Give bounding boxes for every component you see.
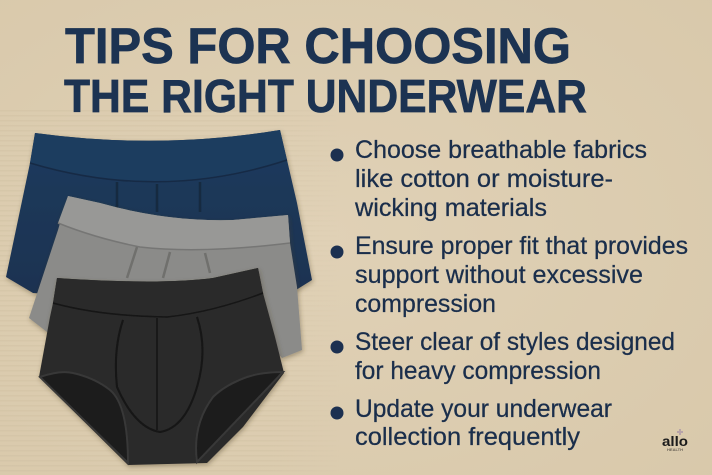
photo: three stacked briefs: [6, 130, 312, 465]
navy briefs: [6, 130, 312, 300]
logo: allo health: allo: [662, 433, 688, 449]
tip 4: Update your underwear: [355, 395, 612, 423]
logo: allo health: [662, 429, 688, 452]
title: THE RIGHT UNDERWEAR: [64, 70, 587, 122]
black briefs: [39, 268, 284, 465]
title: [64, 18, 587, 122]
tip 1: like cotton or moisture-: [355, 165, 613, 193]
tip 2: [330, 232, 688, 318]
logo: allo health: HEALTH: [667, 447, 683, 452]
tip 2: compression: [355, 290, 496, 318]
tip 1: Choose breathable fabrics: [355, 136, 647, 164]
tip 3: [330, 328, 675, 385]
tip 2: Ensure proper fit that provides: [355, 232, 688, 260]
tip 4: collection frequently: [355, 423, 580, 451]
bullet list: [330, 136, 688, 451]
background: [0, 110, 288, 472]
tip 2: support without excessive: [355, 261, 643, 289]
gray briefs: [29, 196, 302, 358]
tip 1: [330, 136, 647, 222]
title: TIPS FOR CHOOSING: [65, 18, 571, 74]
tip 1: wicking materials: [354, 194, 547, 222]
tip 4: [330, 395, 612, 451]
tip 3: for heavy compression: [355, 357, 601, 385]
tip 3: Steer clear of styles designed: [355, 328, 675, 356]
